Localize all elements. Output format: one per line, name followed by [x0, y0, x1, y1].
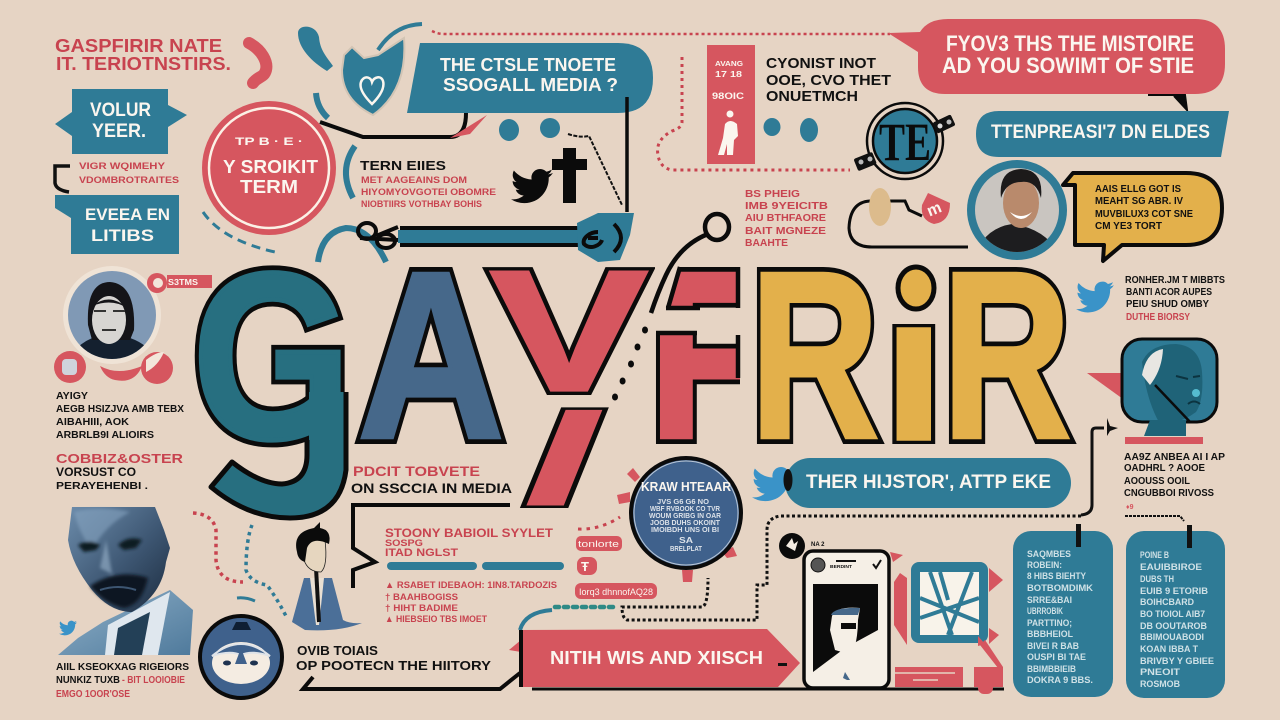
- badge: eveen litibs: LITIBS: [91, 226, 154, 245]
- red panel with figure: [707, 45, 755, 164]
- letter F: F: [649, 224, 771, 488]
- text block right: PEIU SHUD OMBY: [1126, 299, 1209, 310]
- info card right: POINE B: [1140, 550, 1169, 561]
- red arrow banner: [521, 629, 800, 687]
- red tick marks: [617, 468, 737, 582]
- blue info circle: SA: [679, 536, 693, 545]
- blue info circle: JOOB DUHS OKOINT: [650, 520, 721, 527]
- letter A: A: [358, 223, 504, 487]
- badge: volur yeer: [55, 89, 187, 154]
- red caption under badge: VDOMBROTRAITES: [79, 175, 179, 186]
- red triangle: [509, 640, 521, 652]
- red arrows around tile: [890, 552, 1003, 645]
- text block left: AEGB HSIZJVA AMB TEBX: [56, 404, 184, 415]
- teal comma shape: [298, 27, 333, 71]
- red text block: AIU BTHFAORE: [745, 212, 826, 224]
- text block poster: PERAYEHENBI .: [56, 481, 148, 492]
- blue info circle: WOUM GRIBG IN OAR: [649, 513, 721, 520]
- letter R: R: [942, 224, 1071, 488]
- info card left: OUSPI BI TAE: [1027, 652, 1086, 663]
- yellow speech bubble: AAIS ELLG GOT IS: [1095, 184, 1181, 195]
- cartoon man: [292, 522, 362, 630]
- speech banner: social media: SSOGALL MEDIA ?: [443, 75, 618, 95]
- pill: their history: THER HIJSTOR', ATTP EKE: [806, 472, 1051, 493]
- dotted red top line: [432, 31, 890, 34]
- black balloon icon: [779, 533, 825, 559]
- info card right: ROSMOB: [1140, 679, 1180, 690]
- text block left: AYIGY: [56, 391, 88, 402]
- red list: ▲ RSABET IDEBAOH: 1IN8.TARDOZIS: [385, 580, 557, 591]
- caption under portrait: EMGO 1OOR'OSE: [56, 689, 130, 700]
- base line: [532, 688, 1004, 690]
- text: ovid totals: [296, 643, 491, 673]
- red list: ▲ HIEBSEIO TBS IMOET: [385, 614, 487, 625]
- text block under tile: ♦9: [1126, 504, 1134, 511]
- slash stroke: /: [527, 389, 602, 529]
- icon: red m: [922, 193, 950, 224]
- title: top-left heading: [55, 36, 231, 74]
- red triangle pointer: [1087, 373, 1123, 399]
- info card right: KOAN IBBA T: [1140, 644, 1198, 655]
- teal banner: TTENPREASI'7 DN ELDES: [991, 122, 1210, 143]
- letter R: R: [750, 224, 879, 488]
- info card right: DUBS TH: [1140, 574, 1174, 585]
- wavy dashed line: [568, 134, 622, 205]
- teal banner: [976, 111, 1229, 157]
- beige blob: [869, 188, 891, 226]
- info card right: EAUIBBIROE: [1140, 562, 1202, 573]
- info card right: [1126, 525, 1225, 698]
- yellow speech bubble: MEAHT SG ABR. IV: [1095, 196, 1183, 207]
- red panel with figure: AVANG: [715, 61, 744, 68]
- teal dotted connector: [520, 607, 618, 630]
- red tags: Iorq3 dhnnofAQ28: [579, 587, 653, 598]
- badge: eveen litibs: EVEEA EN: [85, 205, 170, 224]
- red text block: BAAHTE: [745, 237, 788, 249]
- title: top-left heading: GASPFIRIR NATE: [55, 36, 222, 56]
- red text block: [745, 188, 828, 249]
- red text heading: ITAD NGLST: [385, 547, 458, 559]
- red arrow banner: NITIH WIS AND XIISCH: [550, 648, 763, 668]
- small dotted line: [1125, 516, 1184, 521]
- letter F: F: [649, 224, 771, 488]
- red text block: IMB 9YEICITB: [745, 200, 828, 212]
- red panel with figure: 17 18: [715, 69, 742, 79]
- red tag: [147, 273, 212, 293]
- blue info circle: IMOIBDH UNS OI BI: [651, 527, 719, 534]
- yellow speech bubble: CM YE3 TORT: [1095, 221, 1162, 232]
- blue info circle: JVS G6 G6 NO: [657, 499, 710, 506]
- info card left: [1013, 524, 1113, 697]
- red tags: tonlorte: [578, 539, 619, 549]
- teal dots: [499, 118, 560, 141]
- text block poster: [56, 451, 184, 492]
- icon: teal window tile: [911, 562, 988, 646]
- teal dots: [764, 118, 818, 142]
- badge: volur yeer: VOLUR: [90, 100, 151, 121]
- icon: cross: [552, 148, 587, 203]
- portrait: smiling man: [967, 160, 1067, 260]
- info card left: BBBHEIOL: [1027, 629, 1073, 640]
- yellow speech bubble: [1063, 173, 1222, 261]
- text block under tile: [1124, 452, 1225, 511]
- text block right: RONHER.JM T MIBBTS: [1125, 275, 1225, 286]
- red circle badge: [202, 101, 336, 235]
- heading: social media: ON SSCCIA IN MEDIA: [351, 480, 512, 496]
- info card left: 8 HIBS BIEHTY: [1027, 571, 1087, 582]
- text block: tern eiies: NIOBTIIRS VOTHBAY BOHIS: [361, 199, 482, 209]
- loop and curved line: [651, 214, 729, 313]
- text block: tern eiies: MET AAGEAINS DOM: [361, 175, 467, 185]
- red tags: Ŧ: [581, 559, 589, 574]
- text block under tile: CNGUBBOI RIVOSS: [1124, 488, 1214, 499]
- blue info circle: [631, 458, 741, 568]
- text block under tile: AA9Z ANBEA AI I AP: [1124, 452, 1225, 463]
- phone mockup: [804, 551, 889, 688]
- slash stroke: /: [527, 389, 602, 529]
- black loop connector: [849, 201, 968, 247]
- text block left: AIBAHIII, AOK: [56, 417, 130, 428]
- badge: eveen litibs: [55, 195, 179, 254]
- teal dash: [237, 598, 255, 601]
- dotted red route: [658, 57, 850, 170]
- red caption under badge: [79, 161, 179, 186]
- info card left: UBRROBIK: [1027, 606, 1063, 617]
- teal arcs: [316, 93, 386, 262]
- title: top-left heading: IT. TERIOTNSTIRS.: [56, 54, 231, 74]
- portrait: woman in circle: [63, 266, 161, 365]
- letter R: R: [750, 224, 879, 488]
- red text heading: [385, 528, 553, 559]
- heading: social media: PDCIT TOBVETE: [353, 463, 480, 479]
- red machine base: [895, 640, 1003, 694]
- letter G with tail: G: [192, 224, 351, 488]
- connector line: [320, 113, 466, 137]
- red tag: S3TMS: [168, 278, 199, 287]
- text: ovid totals: OVIB TOIAIS: [297, 643, 378, 658]
- badge: volur yeer: YEER.: [92, 121, 146, 142]
- red speech bubble: [888, 19, 1225, 94]
- letter V: V: [490, 235, 647, 427]
- red list: † BAAHBOGISS: [385, 592, 458, 603]
- phone mockup: BERDINT: [830, 564, 852, 569]
- yellow speech bubble: MUVBILUX3 COT SNE: [1095, 209, 1193, 220]
- text block left: [56, 391, 184, 441]
- notched bracket: [353, 505, 510, 588]
- base details: [895, 673, 955, 680]
- heading: social media: [351, 463, 512, 496]
- speech banner: social media: THE CTSLE TNOETE: [440, 55, 616, 75]
- info card right: BOIHCBARD: [1140, 597, 1194, 608]
- info card left: ROBEIN:: [1027, 560, 1062, 571]
- letter F: [655, 266, 740, 444]
- red speech bubble: AD YOU SOWIMT OF STIE: [942, 53, 1194, 78]
- text block under tile: OADHRL ? AOOE: [1124, 463, 1205, 474]
- speech banner: social media: [407, 43, 653, 113]
- letter R: R: [942, 224, 1071, 488]
- info card left: SRRE&BAI: [1027, 595, 1072, 606]
- red circle badge: Y SROIKIT: [223, 157, 318, 177]
- text: ovid totals: OP POOTECN THE HIITORY: [296, 658, 491, 673]
- emblem: TE circle: TE: [879, 112, 931, 172]
- info card right: PNEOIT: [1140, 667, 1180, 678]
- black balloon icon: NA 2: [811, 542, 825, 548]
- bubble tail: [1148, 95, 1187, 110]
- info card left: DOKRA 9 BBS.: [1027, 675, 1093, 686]
- info card left: PARTTINO;: [1027, 618, 1072, 629]
- bracket: [55, 166, 70, 192]
- text block: tern eiies: HIYOMYOVGOTEI OBOMRE: [361, 187, 496, 197]
- letter I with dot: I: [885, 294, 943, 474]
- red list: [385, 580, 557, 625]
- red list: † HIHT BADIME: [385, 603, 458, 614]
- letter A: A: [358, 223, 504, 487]
- info card left: BOTBOMDIMK: [1027, 583, 1093, 594]
- blue info circle: BRELPLAT: [670, 546, 703, 553]
- info card right: BBIMOUABODI: [1140, 632, 1204, 643]
- red swoosh: [249, 43, 266, 83]
- red circle badge: TP B · E ·: [235, 136, 303, 148]
- dashed teal arc: [203, 212, 275, 252]
- emblem: TE circle: [853, 103, 956, 179]
- black underline path: [303, 673, 520, 689]
- info card left: BBIMBBIEIB: [1027, 664, 1076, 675]
- dot trail: [612, 326, 648, 400]
- text block: tern eiies: [360, 159, 496, 209]
- scissors and bar: [358, 213, 634, 262]
- letter I with dot: I: [885, 294, 943, 474]
- red dotted arc: [578, 517, 620, 529]
- text block: cyonist: OOE, CVO THET: [766, 72, 891, 89]
- big word: GAYFRIR: [194, 264, 1077, 520]
- caption under portrait: AIIL KSEOKXAG RIGEIORS: [56, 662, 189, 673]
- red panel with figure: 98OIC: [712, 91, 745, 101]
- red speech bubble: FYOV3 THS THE MISTOIRE: [946, 31, 1194, 56]
- caption under portrait: [56, 662, 189, 700]
- caption under portrait: NUNKIZ TUXB: [56, 675, 120, 686]
- text block poster: VORSUST CO: [56, 465, 136, 479]
- icon: red m: m: [925, 199, 944, 220]
- info card left: SAQMBES: [1027, 549, 1071, 560]
- letter G with tail: G: [192, 224, 351, 488]
- info card right: BRIVBY Y GBIEE: [1140, 656, 1214, 667]
- icon: black bird: [511, 169, 553, 203]
- text block under tile: AOOUSS OOIL: [1124, 476, 1190, 487]
- info card right: BO TIOIOL AIB7: [1140, 609, 1205, 620]
- red text heading: SOSPG: [385, 538, 423, 548]
- dotted curves: [193, 513, 287, 618]
- red circle badge: TERM: [240, 177, 298, 197]
- icon: shield with heart: [342, 24, 422, 115]
- text block: cyonist: [766, 55, 891, 105]
- text block: cyonist: ONUETMCH: [766, 88, 858, 105]
- red wing: [450, 115, 487, 138]
- pill: their history: [752, 458, 1071, 508]
- blue info circle: KRAW HTEAAR: [641, 480, 731, 494]
- red caption under badge: VIGR WQIMEHY: [79, 161, 166, 172]
- icon: blue bird right: [1076, 282, 1114, 312]
- portrait: man in jacket: [58, 507, 193, 655]
- info card left: BIVEI R BAB: [1027, 641, 1079, 652]
- text block: tern eiies: TERN EIIES: [360, 159, 446, 173]
- icon: small blue bird: [59, 621, 77, 635]
- text block poster: COBBIZ&OSTER: [56, 451, 184, 466]
- red text heading: STOONY BABIOIL SYYLET: [385, 528, 553, 540]
- text block right: [1125, 275, 1225, 323]
- mascot circle: [200, 616, 282, 698]
- caption under portrait: - BIT LOOIOBIE: [122, 675, 185, 686]
- letter V: V: [490, 235, 647, 427]
- info card right: DB OOUTAROB: [1140, 621, 1207, 632]
- teal progress bars: [387, 562, 564, 570]
- blue info circle: WBF RVBOOK CO TVR: [650, 506, 720, 513]
- info card right: EUIB 9 ETORIB: [1140, 586, 1208, 597]
- text block left: ARBRLB9I ALIOIRS: [56, 430, 154, 441]
- portrait tile: teal head: [1122, 339, 1217, 444]
- black vertical connector: [625, 97, 629, 212]
- text block right: BANTI ACOR AUPES: [1126, 287, 1212, 298]
- red text block: BAIT MGNEZE: [745, 225, 826, 237]
- red social bubbles: [54, 351, 173, 384]
- text block: cyonist: CYONIST INOT: [766, 55, 876, 72]
- red text block: BS PHEIG: [745, 188, 800, 200]
- text block right: DUTHE BIORSY: [1126, 312, 1190, 323]
- red tags: [575, 536, 657, 599]
- arrow route: dotted black: [622, 418, 1118, 620]
